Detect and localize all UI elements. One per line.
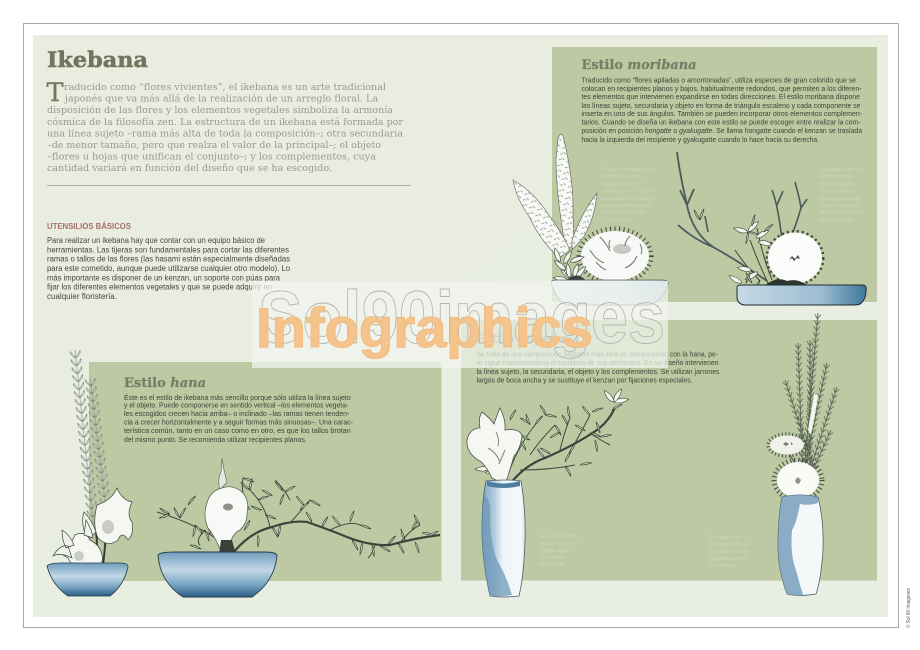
hana text: les escogidos crecen hacia arriba– o inclinado –las ramas tienen tenden-: [124, 409, 350, 418]
note: composición horizontal: variar en función: [819, 203, 860, 209]
panel: estilo moribana: [513, 47, 877, 305]
nageire text: la línea sujeto, la secundaria, el objeto y los complementos. Se utilizan jarrones: [476, 367, 720, 376]
note: sentido vertical: En esta otra: [709, 535, 740, 541]
moribana text: colocan en recipientes planos y bajos, habitualmente redondos, que permiten a los diferen-: [582, 84, 862, 93]
dish: [737, 285, 866, 305]
intro paragraph: raducido como “flores vivientes”, el ikebana es un arte tradicional: [64, 82, 386, 93]
note: composición horizontal: La longitud de los: [819, 167, 863, 173]
note: composición horizontal: en la composi-: [819, 181, 856, 187]
note: sentido vertical: muestra el estilo: [709, 549, 750, 555]
hana text: y el objeto. Puede componerse en sentido vertical –los elementos vegeta-: [124, 400, 349, 410]
hana text: [124, 393, 354, 444]
utensilios text: fijar los diferentes elementos vegetales y que se puede adquirir en: [47, 283, 272, 292]
note: composición vertical: complemento alto: [602, 210, 646, 216]
illustration: vertical nageire arrangement: [768, 313, 841, 596]
utensilios text: herramientas. Las tijeras son fundamentales para cortar las diferentes: [47, 245, 289, 254]
hana text: cia a crecer horizontalmente y a seguir formas más sinuosas–. Una carac-: [124, 418, 354, 426]
drop cap: T: [46, 78, 64, 107]
note: sentido horizontal: un sentido: [540, 555, 566, 561]
utensilios text: ramas o tallos de las flores (las hasami están especialmente diseñadas: [47, 255, 290, 264]
note: composición horizontal: se han usado.: [819, 217, 855, 223]
note: sentido vertical: [709, 535, 751, 569]
note: composición vertical: vertical, la línea: [602, 174, 642, 180]
utensilios heading: UTENSILIOS BÁSICOS: [47, 222, 132, 231]
vase: [482, 480, 525, 597]
note: composición horizontal: [819, 167, 863, 223]
note: composición horizontal: componentes: [819, 174, 853, 180]
hana text: terística común, tanto en un caso como en otro, es que los tallos brotan: [124, 426, 351, 435]
moribana text: tarios. Cuando se diseña un ikebana con este estilo se puede escoger entre realizar la com-: [582, 118, 861, 126]
moribana heading: Estilo moribana: [582, 58, 696, 73]
nageire text: Se trata de una composición bastante más libre en comparación con la hana, pe-: [476, 350, 719, 358]
utensilios text: Para realizar un ikebana hay que contar con un equipo básico de: [47, 236, 266, 245]
intro paragraph: una línea sujeto –rama más alta de toda la composición–; otra secundaria: [47, 128, 403, 139]
utensilios text: para este cometido, aunque puede utilizarse cualquier otro modelo). Lo: [47, 264, 291, 273]
watermark: Sol90images: Sol90images: [258, 276, 665, 359]
note: composición vertical: [602, 167, 656, 223]
intro paragraph: –de menor tamaño, pero que realza el valor de la principal–; el objeto: [47, 140, 381, 151]
note: composición vertical: sujeto forma un: [602, 181, 641, 187]
note: composición horizontal: de las ramas que: [819, 210, 862, 216]
note: composición vertical: secundaria. El diseño: [602, 196, 656, 202]
nageire heading: Estilo nageire: [476, 332, 568, 347]
illustration: vertical moribana arrangement: [513, 134, 668, 305]
nageire text: [476, 350, 720, 384]
vase: [778, 495, 823, 596]
note: sentido horizontal: [540, 534, 579, 568]
hana heading: Estilo hana: [124, 376, 206, 391]
illustration: horizontal moribana arrangement: [677, 152, 866, 305]
note: sentido horizontal: sujeto sigue: [540, 548, 570, 554]
utensilios básicos: [47, 222, 291, 301]
nageire text: ro sigue manteniendose el equilibrio de sus elementos. En su diseño intervienen: [476, 358, 718, 367]
note: sentido horizontal: horizontal.: [540, 562, 566, 568]
intro paragraph: japonés que va más allá de la realización de un arreglo floral. La: [64, 94, 378, 105]
note: sentido horizontal: sición la línea: [540, 541, 575, 547]
intro text block: [46, 78, 404, 174]
illustration: inclined hana arrangement: [157, 458, 440, 597]
note: composición horizontal: horizontal puede: [819, 196, 860, 202]
illustration: horizontal nageire arrangement: [467, 388, 629, 597]
utensilios text: [47, 236, 291, 301]
note: composición vertical: y otro corto.: [602, 217, 632, 223]
moribana text: hacia la izquierda del recipiente y gyakugatte cuando lo hace hacia su derecha.: [582, 135, 819, 144]
panel: estilo hana: [47, 349, 442, 597]
note: sentido horizontal: En esta compo-: [540, 534, 579, 540]
bowl: [158, 552, 277, 597]
intro paragraph: –flores u hojas que unifican el conjunto–; y los complementos, cuya: [47, 152, 376, 163]
panel: estilo nageire: [461, 313, 877, 597]
bowl: [47, 563, 128, 596]
intro paragraph: disposición de las flores y los elementos vegetales simboliza la armonía: [47, 105, 393, 116]
credit: © Sol 90 Imágenes: [905, 588, 912, 628]
watermark veil: [252, 281, 668, 368]
moribana text: posición en posición hongatte o gyakugatte. Se llama hongatte cuando el kenzan se traslada: [582, 126, 863, 135]
moribana text: inserta en uno de sus ángulos. También se pueden incorporar otros elementos complemen-: [582, 109, 863, 118]
note: composición horizontal: ción moribana: [819, 189, 855, 195]
note: sentido vertical: do vertical.: [709, 563, 736, 569]
nageire text: largos de boca ancha y se sustituye el kenzan por fijaciones especiales.: [476, 376, 692, 384]
moribana text: Traducido como “flores apiladas o amontonadas”, utiliza especies de gran colorido que se: [582, 76, 856, 84]
note: sentido vertical: nageire en senti-: [709, 556, 751, 562]
moribana text: las líneas sujeto, secundaria y objeto en forma de triángulo escaleno y cada componente se: [582, 101, 860, 110]
intro paragraph: cósmica de la filosofía zen. La estructura de un ikebana está formada por: [47, 117, 404, 128]
watermark: Infographics: Infographics: [256, 296, 593, 359]
title: Ikebana: [47, 48, 148, 73]
utensilios text: más importante es disponer de un kenzan, un soporte con púas para: [47, 273, 281, 282]
dish: [551, 280, 668, 305]
note: composición vertical: ángulo de 45º con la: [602, 188, 654, 195]
note: sentido vertical: composición se: [709, 542, 748, 548]
hana text: Éste es el estilo de ikebana más sencillo porque sólo utiliza la línea sujeto: [124, 393, 351, 402]
utensilios text: cualquier floristería.: [47, 292, 117, 301]
intro paragraph: cantidad variará en función del diseño que se ha escogido.: [47, 163, 332, 174]
moribana text: [582, 76, 863, 144]
note: composición vertical: se acompaña de un: [602, 203, 651, 209]
moribana text: tes elementos que intervienen expandirse en todas direcciones. El estilo moribana dispone: [582, 92, 860, 101]
intro paragraph: [47, 82, 404, 174]
note: composición vertical: En esta composición: [602, 167, 654, 173]
illustration: vertical hana arrangement: [47, 349, 132, 596]
hana text: del mismo punto. Se recomienda utilizar recipientes planos.: [124, 435, 307, 444]
